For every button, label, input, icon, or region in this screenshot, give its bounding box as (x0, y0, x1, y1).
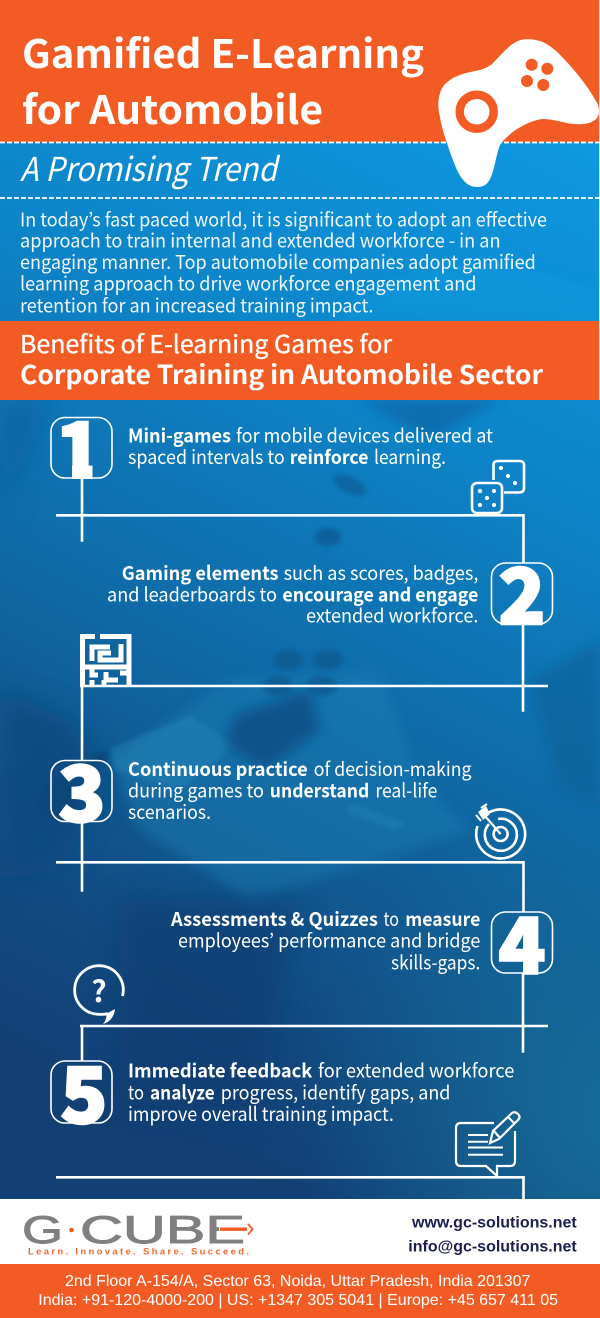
website and email: info@gc-solutions.net (408, 1238, 577, 1255)
benefit 2 text: Gaming elements (122, 559, 279, 586)
benefit 2 text (107, 559, 478, 629)
intro paragraph: retention for an increased training impact. (20, 291, 374, 318)
benefit 3 text: real-life (375, 776, 437, 803)
G-Cube logo: G (22, 1209, 63, 1252)
benefit 2 text: extended workforce. (306, 602, 478, 629)
intro paragraph (20, 206, 547, 318)
footer contact band (0, 1199, 600, 1264)
number 1 badge (50, 416, 113, 479)
benefit 1 text: reinforce (290, 443, 368, 470)
benefit 2: gaming elements (80, 536, 552, 760)
address band: 2nd Floor A-154/A, Sector 63, Noida, Uttar Pradesh, India 201307 (65, 1273, 531, 1290)
intro paragraph: learning approach to drive workforce engagement and (20, 269, 476, 296)
icon: dice (472, 461, 524, 513)
G-Cube logo: Learn. Innovate. Share. Succeed. (28, 1247, 249, 1258)
benefits heading: Corporate Training in Automobile Sector (20, 355, 544, 392)
benefit 5 text: progress, identify gaps, and (221, 1078, 450, 1105)
benefit 3 text: scenarios. (128, 798, 211, 825)
benefits heading (0, 321, 600, 400)
benefit 1 text (128, 422, 493, 470)
benefit 1: mini-games (50, 416, 526, 562)
benefit 4 text: skills-gaps. (391, 948, 480, 975)
benefit 4 text: Assessments & Quizzes (170, 905, 378, 932)
number 4 badge: 4 (499, 885, 545, 996)
benefit 5 text (128, 1057, 514, 1127)
benefit 1 text: learning. (374, 443, 446, 470)
benefit 1 text: spaced intervals to (128, 443, 285, 470)
benefit 3 text: Continuous practice (128, 755, 308, 782)
benefit 3: continuous practice (51, 734, 525, 912)
benefit 4 text: to (384, 905, 399, 932)
benefit 1 text: Mini-games (128, 422, 231, 449)
number 2 badge: 2 (499, 536, 545, 647)
benefit 1 text: for mobile devices delivered at (236, 422, 493, 449)
benefit 2 text: and leaderboards to (107, 580, 277, 607)
benefit 3 text: of decision-making (314, 755, 472, 782)
benefit 5: immediate feedback (51, 1035, 524, 1199)
benefit 3 text (128, 755, 472, 825)
benefit 5 text: to (128, 1078, 144, 1105)
icon: feedback note (456, 1112, 520, 1176)
number 1 badge: 1 (56, 390, 102, 501)
edge highlight (599, 0, 600, 400)
benefit 2 text: encourage and engage (282, 580, 478, 607)
benefit 5 text: improve overall training impact. (128, 1100, 394, 1127)
intro paragraph: approach to train internal and extended workforce - in an (20, 227, 501, 254)
benefit 4 text: employees’ performance and bridge (178, 926, 480, 953)
benefit 3 text: during games to (128, 776, 264, 803)
icon: target (476, 804, 525, 858)
benefit 4 text (170, 905, 480, 975)
number 3 badge: 3 (59, 734, 105, 845)
benefit 4 text: measure (405, 905, 480, 932)
icon: maze (81, 636, 130, 685)
intro paragraph: In today’s fast paced world, it is significant to adopt an effective (20, 206, 547, 233)
benefit 2 text: such as scores, badges, (284, 559, 478, 586)
address band (0, 1264, 600, 1318)
number 5 badge: 5 (61, 1035, 107, 1146)
address band: India: +91-120-4000-200 | US: +1347 305 5041 | Europe: +45 657 411 05 (38, 1292, 558, 1309)
icon: game controller (438, 39, 599, 187)
website and email: www.gc-solutions.net (411, 1214, 577, 1231)
icon: question bubble: ? (91, 967, 107, 1011)
subtitle: A Promising Trend (20, 143, 280, 191)
title banner: for Automobile (22, 80, 323, 136)
G-Cube logo: CUBE (80, 1209, 245, 1252)
benefit 5 text: analyze (150, 1078, 215, 1105)
benefit 5 text: Immediate feedback (128, 1057, 313, 1084)
icon: question bubble (75, 966, 123, 1024)
benefits heading: Benefits of E-learning Games for (20, 326, 393, 361)
website and email (408, 1214, 577, 1255)
G-Cube logo (22, 1209, 252, 1258)
title banner (0, 0, 600, 142)
benefit 3 text: understand (270, 776, 369, 803)
intro paragraph: engaging manner. Top automobile companies adopt gamified (20, 248, 536, 275)
benefit 4: assessments and quizzes (75, 885, 553, 1061)
benefit 5 text: for extended workforce (318, 1057, 514, 1084)
title banner: Gamified E-Learning (22, 24, 424, 80)
